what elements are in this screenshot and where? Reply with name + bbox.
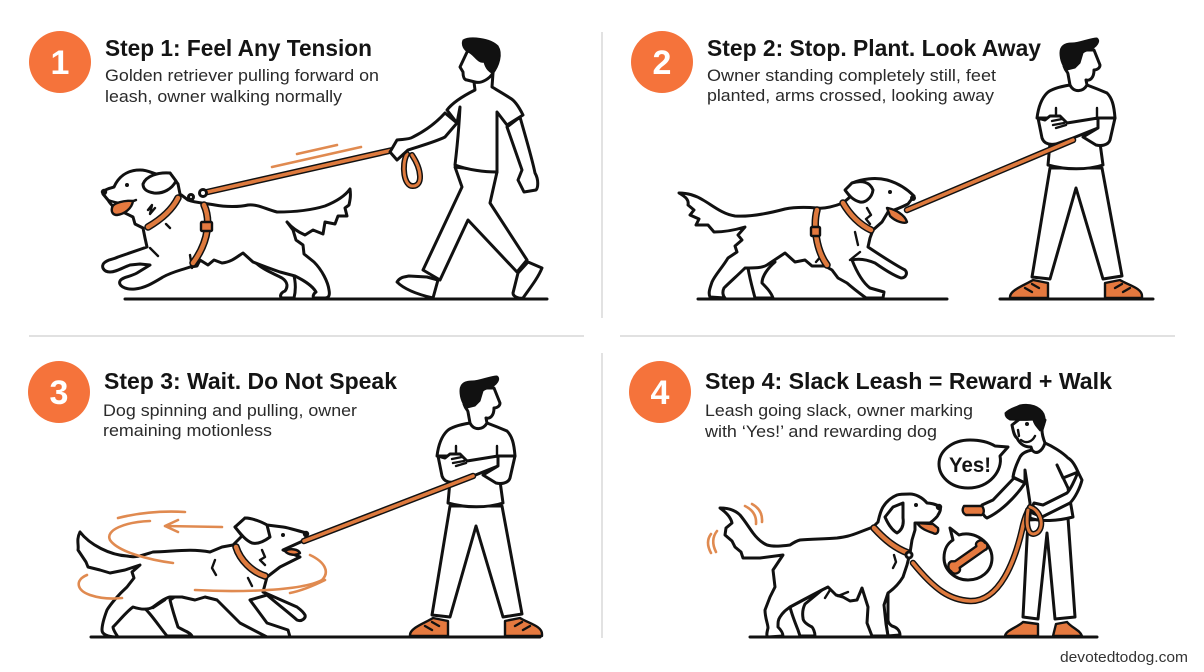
dog pulling on leash <box>679 179 916 298</box>
panel: step 1 <box>29 31 547 299</box>
description step 4: with ‘Yes!’ and rewarding dog <box>704 422 937 441</box>
panel: step 2 <box>631 31 1153 299</box>
number badge 3: 3 <box>50 374 68 412</box>
tail wag lines <box>708 504 762 553</box>
ground line <box>125 298 547 300</box>
number badge 4 <box>629 361 691 423</box>
owner rewarding dog <box>963 404 1082 636</box>
owner motionless <box>410 376 542 636</box>
owner arms crossed <box>1010 38 1142 298</box>
taut leash <box>304 476 473 541</box>
dog pulling forward <box>101 170 350 298</box>
panel: step 3 <box>28 361 542 637</box>
description step 3: remaining motionless <box>103 421 272 440</box>
ground line <box>750 636 1097 638</box>
panel: step 4 <box>629 361 1112 637</box>
taut leash <box>907 140 1073 210</box>
description step 4 <box>704 401 973 441</box>
heading step 3: Step 3: Wait. Do Not Speak <box>104 368 397 394</box>
tension motion lines <box>272 145 361 167</box>
number badge 3 <box>28 361 90 423</box>
yes speech bubble <box>939 440 1008 488</box>
number badge 2 <box>631 31 693 93</box>
yes speech bubble: Yes! <box>949 454 991 477</box>
description step 1: leash, owner walking normally <box>105 87 343 106</box>
description step 2: Owner standing completely still, feet <box>707 66 996 85</box>
description step 2 <box>707 66 996 105</box>
owner walking <box>390 38 542 298</box>
description step 1 <box>105 66 379 106</box>
bone thought bubble <box>944 528 992 580</box>
description step 2: planted, arms crossed, looking away <box>707 86 995 105</box>
description step 3 <box>103 401 357 440</box>
description step 4: Leash going slack, owner marking <box>705 401 973 420</box>
footer source: devotedtodog.com <box>1060 649 1188 666</box>
happy dog <box>720 494 942 637</box>
slack leash <box>913 503 1035 601</box>
ground line <box>91 636 540 638</box>
spinning dog <box>78 518 309 637</box>
description step 3: Dog spinning and pulling, owner <box>103 401 357 420</box>
heading step 4: Step 4: Slack Leash = Reward + Walk <box>705 368 1112 394</box>
ground lines <box>698 298 1153 300</box>
taut leash <box>200 150 420 196</box>
heading step 1: Step 1: Feel Any Tension <box>105 35 372 61</box>
number badge 1: 1 <box>51 44 69 82</box>
number badge 2: 2 <box>653 44 671 82</box>
number badge 1 <box>29 31 91 93</box>
description step 1: Golden retriever pulling forward on <box>105 66 379 85</box>
spin motion arcs <box>79 512 326 599</box>
heading step 2: Step 2: Stop. Plant. Look Away <box>707 35 1041 61</box>
number badge 4: 4 <box>651 374 670 412</box>
